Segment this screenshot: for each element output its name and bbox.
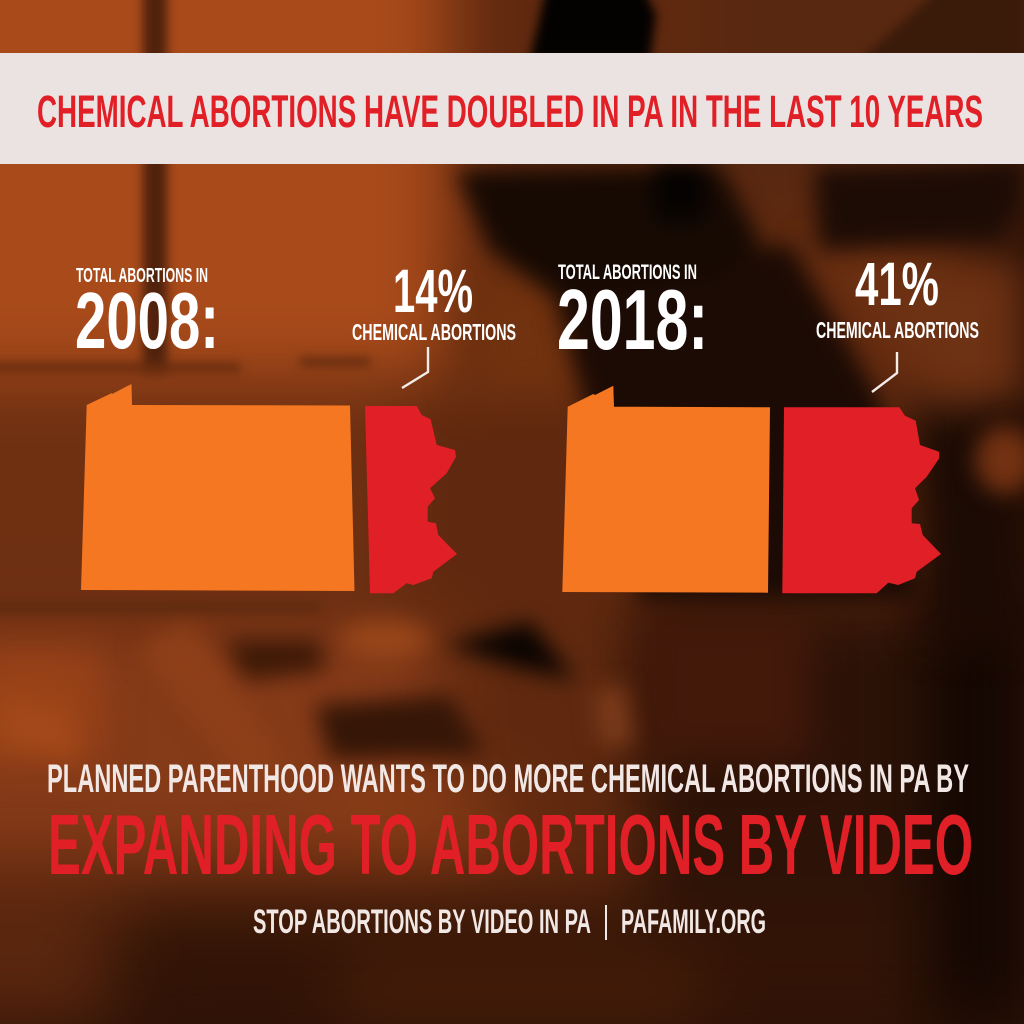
stat: 14% chemical abortions	[352, 257, 516, 345]
map: Pennsylvania red share	[782, 407, 941, 593]
stat: 41% chemical abortions	[816, 250, 979, 343]
heading: total abortions in 2018	[557, 261, 708, 368]
panel: 2018	[557, 250, 979, 593]
heading: total abortions in 2008	[75, 265, 219, 365]
panel: 2008	[75, 257, 516, 593]
map: Pennsylvania orange share	[562, 386, 770, 593]
footer call to action: STOP ABORTIONS BY VIDEO IN PA	[253, 903, 591, 941]
map: Pennsylvania orange share	[81, 384, 354, 591]
heading: total abortions in 2018: 2018:	[557, 273, 708, 368]
callout line	[402, 347, 428, 388]
callout line	[872, 352, 897, 392]
map: Pennsylvania red share	[365, 406, 457, 593]
stat: 14% chemical abortions: 14%	[393, 257, 473, 325]
heading: total abortions in 2008: 2008:	[75, 276, 219, 365]
title banner	[0, 53, 1024, 164]
stat: 41% chemical abortions: 41%	[855, 250, 939, 318]
heading: total abortions in 2008: TOTAL ABORTIONS IN	[76, 265, 208, 287]
footer call to action: PAFAMILY.ORG	[621, 903, 766, 941]
stat: 14% chemical abortions: CHEMICAL ABORTIONS	[352, 319, 516, 345]
heading: total abortions in 2018: TOTAL ABORTIONS IN	[558, 261, 697, 284]
